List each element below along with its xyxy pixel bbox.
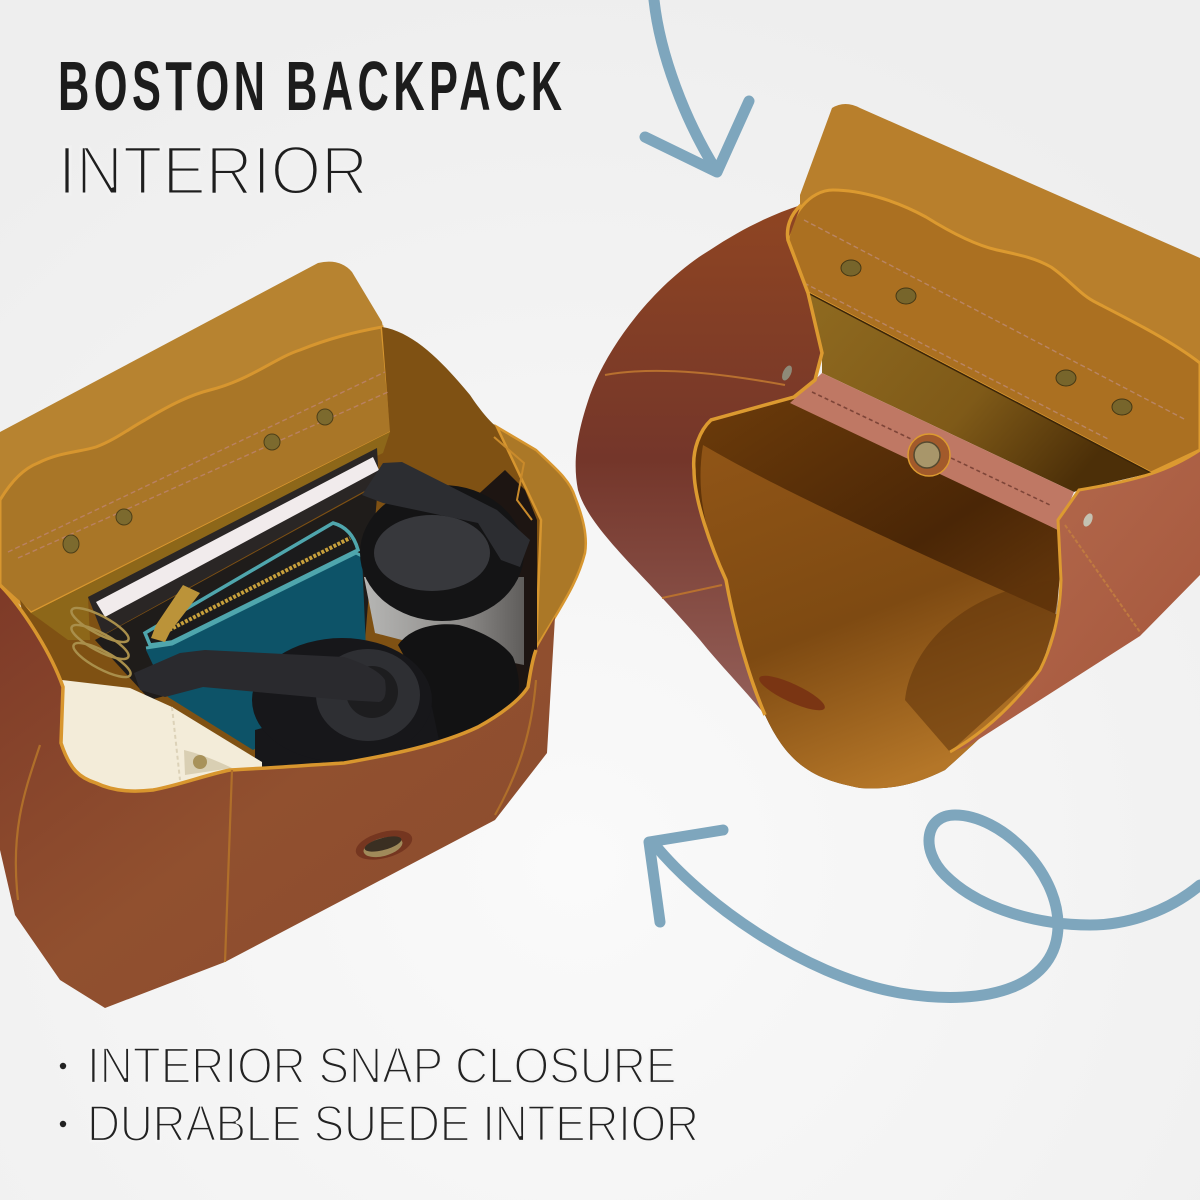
rivet on left leather xyxy=(780,364,794,382)
headband xyxy=(134,650,386,702)
lower suede lip xyxy=(31,432,390,640)
notebook xyxy=(68,448,379,683)
rivet on right leather xyxy=(1081,512,1095,528)
interior opening xyxy=(694,397,1060,788)
left ear cup xyxy=(252,638,432,762)
bullet dot 2 xyxy=(60,1121,66,1127)
notebook rings xyxy=(68,602,134,683)
label patch xyxy=(756,670,828,716)
bullet: interior snap closure: INTERIOR SNAP CLOSURE xyxy=(87,1038,677,1095)
arrow: top, pointing down to right bag xyxy=(645,0,749,172)
cream pouch xyxy=(55,680,262,800)
title: Boston Backpack: BOSTON BACKPACK xyxy=(58,47,562,126)
stitch lines xyxy=(8,372,388,558)
left leather raw edge xyxy=(694,205,822,715)
suede interior back wall xyxy=(20,327,541,795)
dark backing xyxy=(95,485,378,700)
lower suede wall xyxy=(808,293,1151,492)
bottle handle xyxy=(362,462,530,567)
outer suede flap xyxy=(800,104,1200,420)
right leather seam xyxy=(1065,525,1140,632)
bottle xyxy=(360,462,530,665)
pink snap strap xyxy=(790,373,1074,530)
headphones xyxy=(134,624,519,770)
bullet: durable suede interior: DURABLE SUEDE INTERIOR xyxy=(87,1096,699,1153)
strap snap button xyxy=(908,434,950,476)
wallet zip pull xyxy=(151,585,200,642)
left leather side xyxy=(576,205,822,715)
heading xyxy=(58,47,562,209)
arrow: looping arrow, pointing to left bag xyxy=(649,815,1200,997)
stitch lines xyxy=(804,220,1186,440)
wallet xyxy=(145,523,366,750)
bullet dot 1 xyxy=(60,1063,66,1069)
dark inner gusset xyxy=(450,470,537,720)
right leather raw edge xyxy=(950,450,1200,752)
inner suede flap with rivets xyxy=(0,327,392,613)
dark fill under ear cups xyxy=(255,690,500,770)
right leather side xyxy=(950,450,1200,752)
magnetic snap xyxy=(353,825,415,865)
rivets xyxy=(63,409,333,553)
raw leather rim xyxy=(0,585,536,791)
rivets xyxy=(841,260,1132,415)
gusset fold xyxy=(494,437,532,520)
interior pocket xyxy=(700,445,1058,788)
bullet list xyxy=(60,1038,699,1153)
outer suede flap xyxy=(0,262,400,540)
left leather seams xyxy=(605,371,785,598)
center and side seams xyxy=(16,680,536,962)
right ear cup xyxy=(398,624,519,745)
pocket shadow fold xyxy=(905,580,1058,752)
right suede side xyxy=(497,427,586,648)
inner suede flap with rivets xyxy=(788,190,1200,473)
right bag: open, empty xyxy=(576,104,1200,788)
left bag: open, filled with items xyxy=(0,262,586,1008)
front leather body xyxy=(0,585,555,1008)
subtitle: Interior: INTERIOR xyxy=(58,132,368,209)
